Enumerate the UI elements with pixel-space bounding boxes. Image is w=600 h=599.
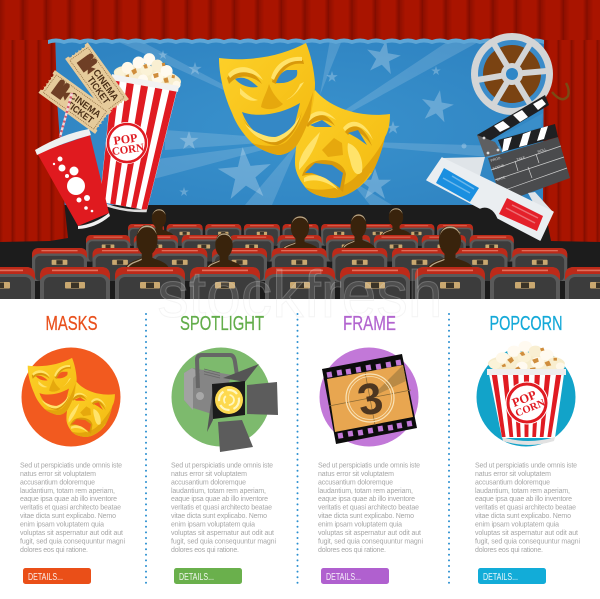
icon: popcorn in teal circle: CORN <box>514 398 547 420</box>
text block: accusantium doloremque <box>171 479 246 486</box>
text block: voluptas sit aspernatur aut odit aut <box>318 530 421 537</box>
text block: vitae dicta sunt explicabo. Nemo <box>475 513 571 520</box>
text block: fugit, sed quia consequuntur magni <box>171 538 276 545</box>
icon: clapperboard <box>477 95 570 197</box>
text block: eaque ipsa quae ab illo inventore <box>20 496 117 503</box>
icon: popcorn in teal circle <box>476 341 576 446</box>
seat row 1 <box>128 224 473 246</box>
audience back row <box>144 208 411 236</box>
text block: enim ipsam voluptatem quia <box>475 522 559 528</box>
text block: natus error sit voluptatem <box>318 471 394 478</box>
text block: eaque ipsa quae ab illo inventore <box>318 496 415 503</box>
text block <box>171 462 276 554</box>
icon: film reel <box>471 33 569 115</box>
button: details <box>321 568 389 584</box>
icon: clapperboard: SCENE <box>492 163 505 171</box>
icon: film frame in purple circle: 3 <box>354 373 387 426</box>
button: details: DETAILS... <box>179 572 214 583</box>
button: details: DETAILS... <box>483 572 518 583</box>
left side curtain <box>0 30 68 242</box>
heading: popcorn: POPCORN <box>490 313 562 335</box>
icon: masks in orange circle <box>22 348 120 446</box>
text block: laudantium, totam rem aperiam, <box>171 488 266 495</box>
text block: veritatis et quasi architecto beatae <box>318 505 419 512</box>
icon: theatre masks hero <box>219 43 390 198</box>
text block: veritatis et quasi architecto beatae <box>20 505 121 512</box>
text block: laudantium, totam rem aperiam, <box>475 488 570 495</box>
text block: voluptas sit aspernatur aut odit aut <box>171 530 274 537</box>
text block: Sed ut perspiciatis unde omnis iste <box>20 462 122 470</box>
heading: masks: MASKS <box>46 313 98 335</box>
text block <box>20 462 125 554</box>
text block: accusantium doloremque <box>475 479 550 486</box>
text block: dolores eos qui ratione. <box>318 547 386 554</box>
icon: soda cup <box>35 93 110 229</box>
text block <box>475 462 580 554</box>
seat row 4 <box>0 267 600 309</box>
blue scallop strip <box>48 30 544 44</box>
text block: vitae dicta sunt explicabo. Nemo <box>318 513 414 520</box>
button: details <box>174 568 242 584</box>
text block: vitae dicta sunt explicabo. Nemo <box>20 513 116 520</box>
seat row 2 <box>86 235 514 261</box>
button: details <box>23 568 91 584</box>
cinema screen <box>55 35 545 205</box>
text block: laudantium, totam rem aperiam, <box>20 488 115 495</box>
text block: veritatis et quasi architecto beatae <box>475 505 576 512</box>
audience middle row <box>281 214 375 250</box>
panel: masks <box>20 313 125 584</box>
text block: eaque ipsa quae ab illo inventore <box>475 496 572 503</box>
panel: popcorn <box>475 313 580 584</box>
text block: fugit, sed quia consequuntur magni <box>20 538 125 545</box>
text block <box>318 462 423 554</box>
icon: spotlight in green circle <box>172 348 278 452</box>
text block: vitae dicta sunt explicabo. Nemo <box>171 513 267 520</box>
text block: dolores eos qui ratione. <box>171 547 239 554</box>
button: details: DETAILS... <box>326 572 361 583</box>
text block: accusantium doloremque <box>318 479 393 486</box>
heading: frame: FRAME <box>343 313 396 335</box>
text block: enim ipsam voluptatem quia <box>20 522 104 528</box>
icon: clapperboard: PROD. <box>490 156 502 163</box>
text block: laudantium, totam rem aperiam, <box>318 488 413 495</box>
text block: voluptas sit aspernatur aut odit aut <box>20 530 123 537</box>
panels background <box>0 299 600 599</box>
button: details <box>478 568 546 584</box>
text block: veritatis et quasi architecto beatae <box>171 505 272 512</box>
icon: clapperboard: ROLL <box>537 147 547 154</box>
icon: clapperboard: TAKE <box>516 155 526 162</box>
seat row 3 <box>32 248 567 281</box>
text block: natus error sit voluptatem <box>20 471 96 478</box>
text block: natus error sit voluptatem <box>171 471 247 478</box>
right side curtain <box>543 30 600 242</box>
heading: spotlight: SPOTLIGHT <box>180 313 264 335</box>
panel: frame <box>318 313 423 584</box>
text block: Sed ut perspiciatis unde omnis iste <box>475 462 577 470</box>
text block: dolores eos qui ratione. <box>20 547 88 554</box>
text block: enim ipsam voluptatem quia <box>171 522 255 528</box>
icon: film frame in purple circle <box>320 348 418 446</box>
light rays <box>110 38 500 205</box>
icon: 3D glasses <box>427 157 553 240</box>
icon: popcorn in teal circle: POP <box>510 387 539 410</box>
top curtain valance <box>0 0 600 40</box>
text block: accusantium doloremque <box>20 479 95 486</box>
icon: cinema tickets <box>38 42 129 134</box>
text block: fugit, sed quia consequuntur magni <box>318 538 423 545</box>
text block: natus error sit voluptatem <box>475 471 551 478</box>
text block: eaque ipsa quae ab illo inventore <box>171 496 268 503</box>
text block: fugit, sed quia consequuntur magni <box>475 538 580 545</box>
text block: voluptas sit aspernatur aut odit aut <box>475 530 578 537</box>
icon: hero popcorn: CORN <box>111 142 145 158</box>
panel: spotlight <box>171 313 278 584</box>
text block: enim ipsam voluptatem quia <box>318 522 402 528</box>
dotted dividers <box>146 314 449 587</box>
text block: Sed ut perspiciatis unde omnis iste <box>318 462 420 470</box>
watermark: stockfresh <box>158 257 442 331</box>
text block: Sed ut perspiciatis unde omnis iste <box>171 462 273 470</box>
stars <box>158 37 466 200</box>
text block: dolores eos qui ratione. <box>475 547 543 554</box>
dark floor <box>0 200 600 305</box>
audience front row <box>125 225 473 268</box>
button: details: DETAILS... <box>28 572 63 583</box>
icon: hero popcorn: POP <box>113 131 138 148</box>
icon: clapperboard: DATE <box>496 175 507 182</box>
scene: cinema hall <box>0 0 600 309</box>
icon: hero popcorn <box>89 48 185 216</box>
